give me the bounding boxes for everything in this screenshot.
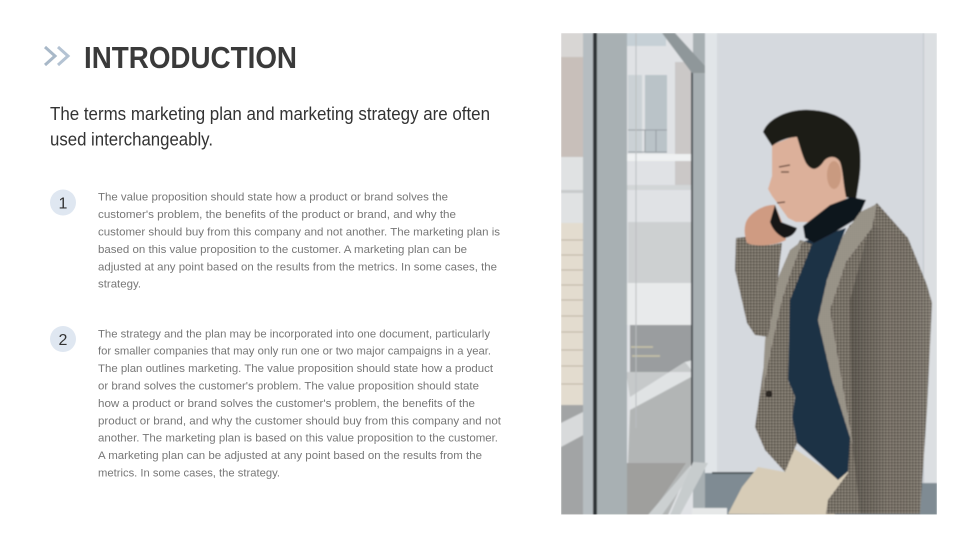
- text block 2: The plan outlines marketing. The value proposition should state how a product: [98, 363, 494, 375]
- slide: [44, 33, 937, 514]
- number badge 1: 1: [59, 196, 68, 212]
- jacket right side: [818, 203, 932, 514]
- text block 1: customer should buy from this company and not another. The marketing plan is: [98, 226, 500, 238]
- intro statement: The terms marketing plan and marketing strategy are often: [50, 104, 490, 124]
- neck and face: [768, 130, 850, 222]
- outside centre glass: [626, 33, 693, 515]
- text block 2: [98, 328, 502, 480]
- text block 2: for smaller companies that may only run one or two major campaigns in a year.: [98, 346, 491, 358]
- phone: [770, 205, 797, 238]
- text block 1: customer's problem, the benefits of the product or brand, and why the: [98, 209, 456, 221]
- lapels: [818, 204, 877, 445]
- jacket sleeve: [735, 237, 782, 337]
- radiator: [692, 508, 727, 515]
- photo: man on the phone by a window: [561, 33, 937, 515]
- number badge 2: [50, 326, 76, 352]
- text block 2: how a product or brand solves the customer's problem, the benefits of the: [98, 398, 475, 410]
- intro statement: used interchangeably.: [50, 130, 213, 150]
- text block 2: or brand solves the customer's problem. The value proposition should state: [98, 380, 479, 392]
- hair: [763, 110, 861, 200]
- text block 1: The value proposition should state how a product or brand solves the: [98, 192, 448, 204]
- text block 1: [98, 192, 500, 291]
- sweater: [788, 228, 852, 480]
- text block 2: product or brand, and why the customer should buy from this company and not: [98, 415, 502, 427]
- floor: [680, 473, 937, 515]
- window sill: [670, 462, 708, 515]
- jacket front left: [755, 240, 812, 472]
- cord: [635, 33, 637, 428]
- text block 1: adjusted at any point based on the results from the metrics. In some cases, the: [98, 261, 497, 273]
- hand: [745, 205, 786, 245]
- window frame: [583, 33, 593, 515]
- intro statement: [50, 104, 490, 150]
- jacket button: [766, 390, 772, 398]
- text block 1: based on this value proposition to the customer. A marketing plan can be: [98, 244, 467, 256]
- text block 2: metrics. In some cases, the strategy.: [98, 468, 280, 480]
- outside left panel: [562, 34, 582, 56]
- text block 2: another. The marketing plan is based on this value proposition to the customer.: [98, 433, 498, 445]
- text block 2: A marketing plan can be adjusted at any point based on the results from the: [98, 450, 482, 462]
- text block 1: strategy.: [98, 279, 141, 291]
- turtleneck: [803, 197, 866, 243]
- text block 2: The strategy and the plan may be incorporated into one document, particularly: [98, 328, 490, 340]
- title: INTRODUCTION: [84, 40, 297, 75]
- facial features: [777, 165, 790, 203]
- wall: [716, 33, 924, 483]
- trousers: [728, 447, 852, 515]
- ear: [827, 161, 841, 189]
- number badge 2: 2: [59, 332, 68, 349]
- icon: double chevron: [45, 47, 68, 65]
- number badge 1: [50, 190, 76, 216]
